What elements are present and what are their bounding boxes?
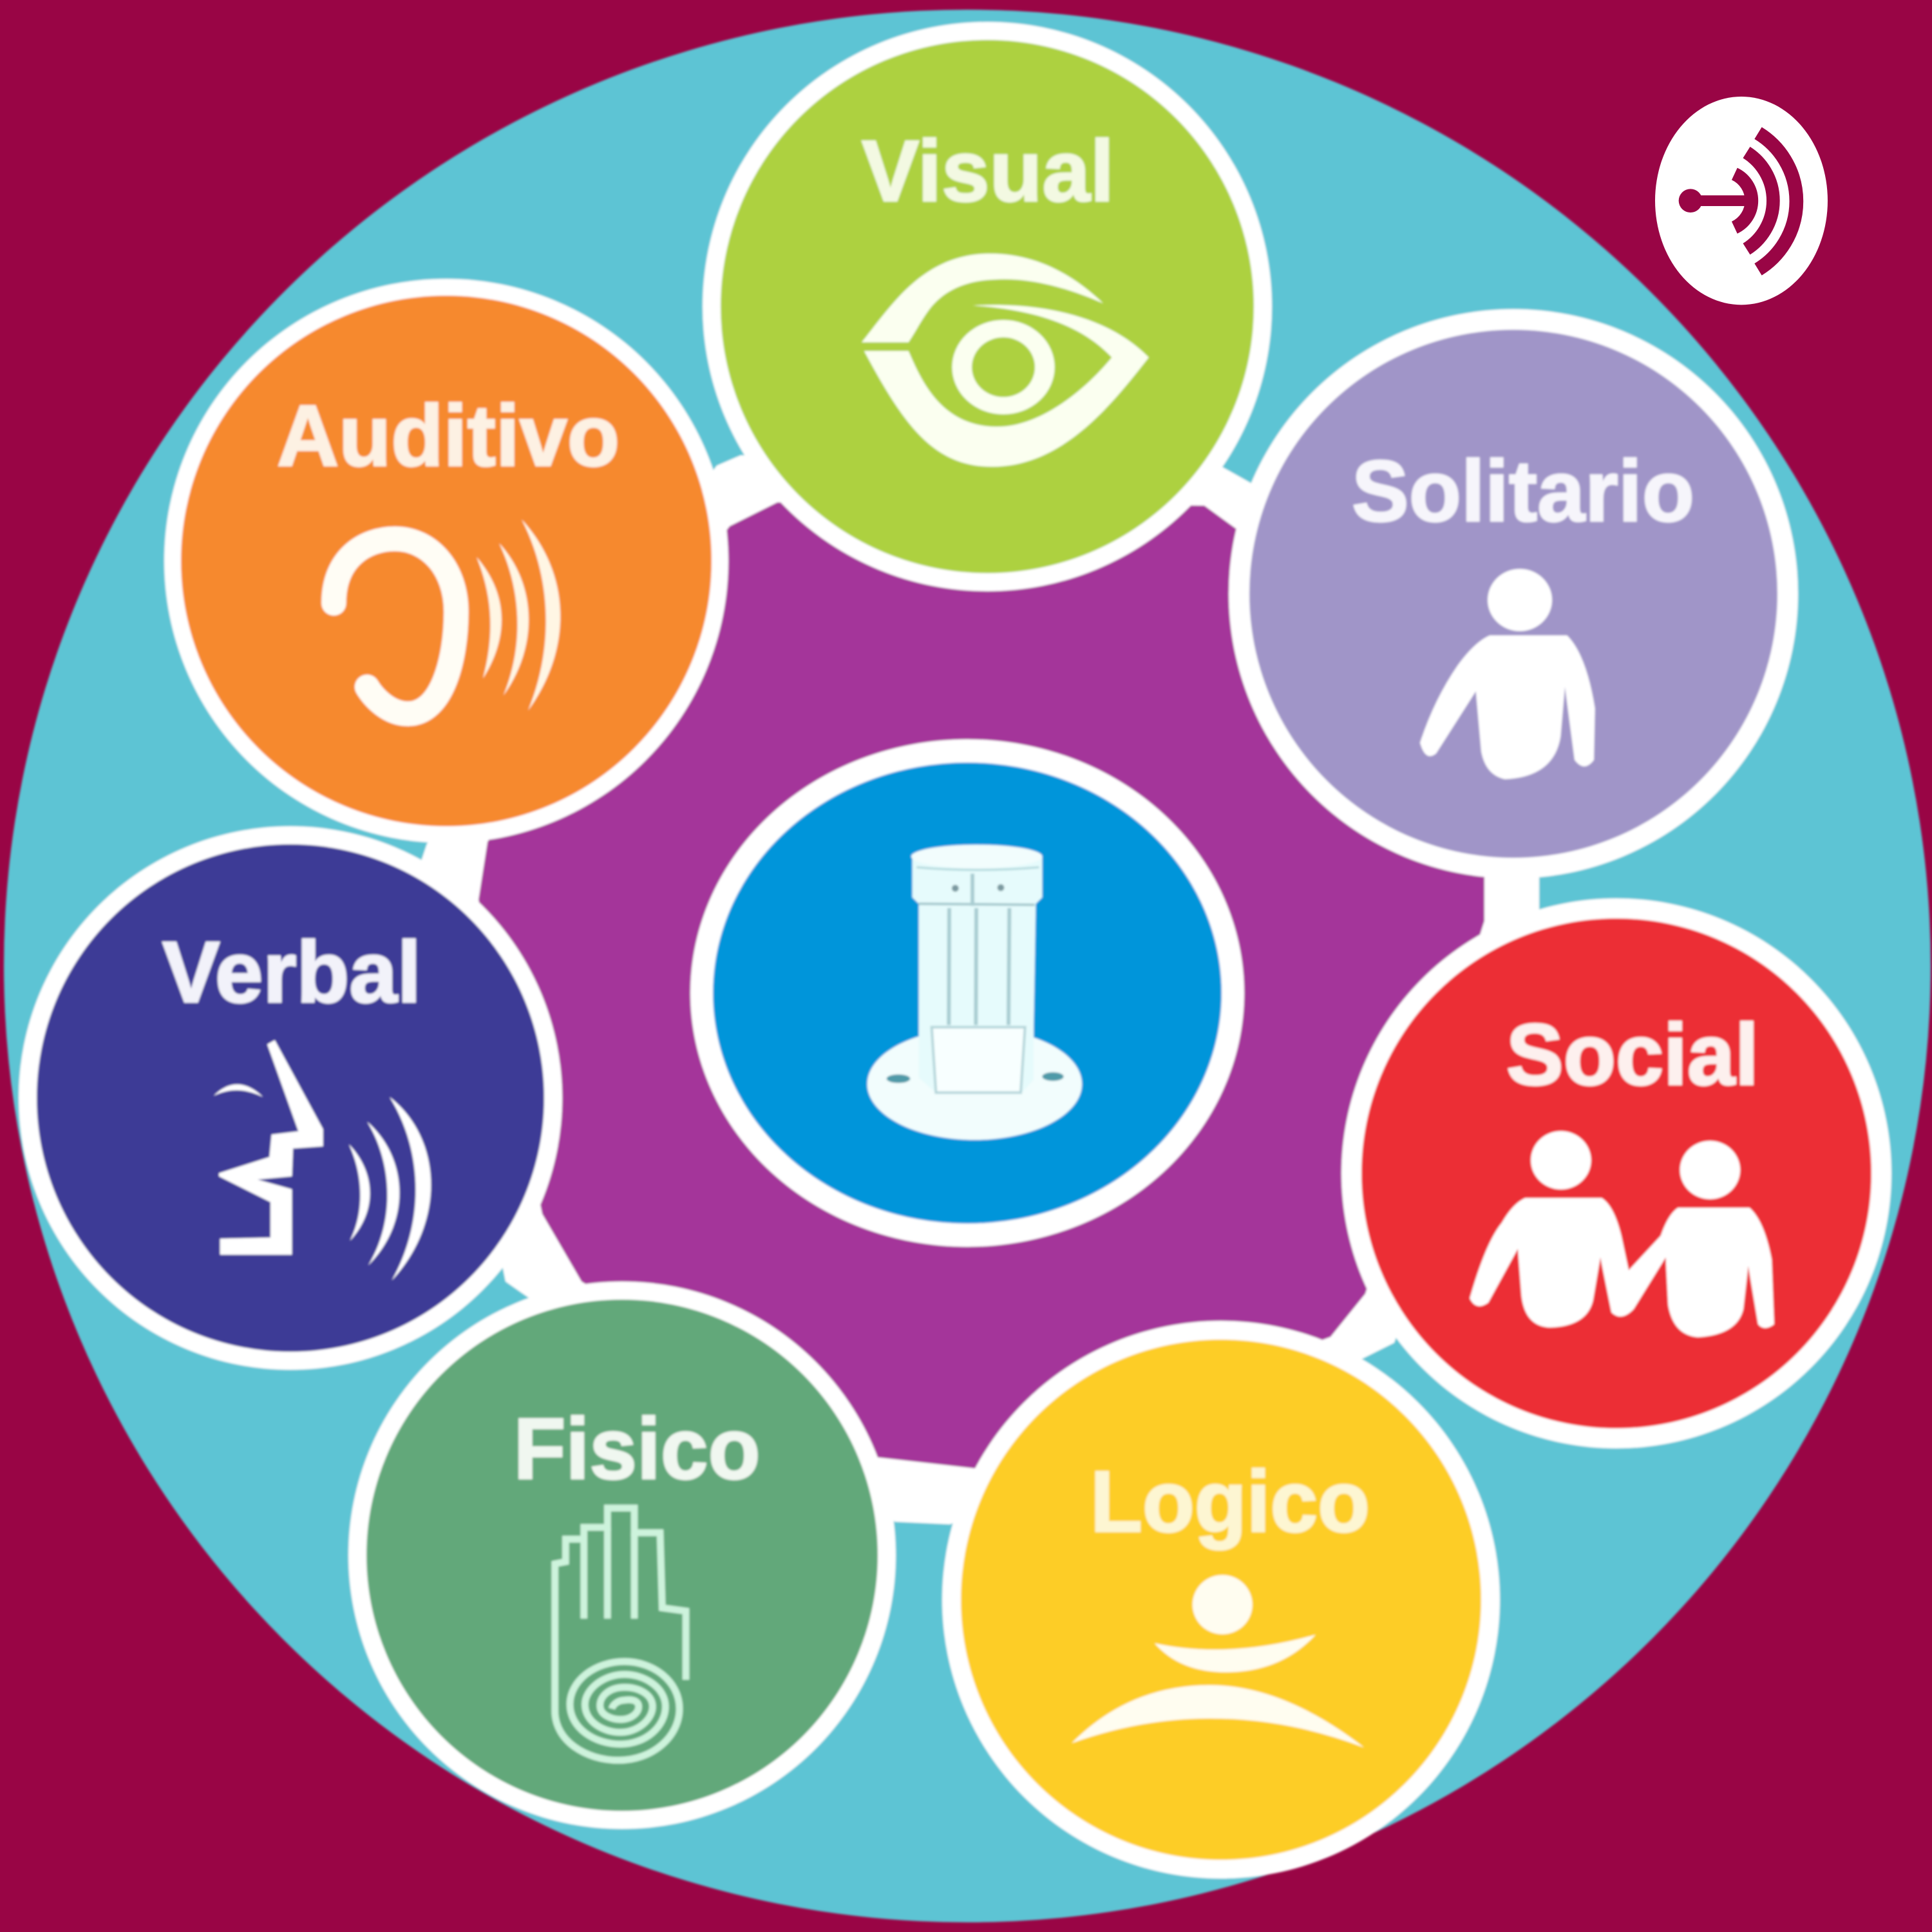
panel: Social — [1341, 898, 1891, 1448]
Visual green disc — [721, 40, 1254, 573]
panel: Auditivo — [164, 279, 728, 843]
icon: hand with spiral — [555, 1508, 686, 1760]
heading: Social: Social — [1506, 1006, 1759, 1103]
heading: Verbal: Verbal — [162, 923, 421, 1021]
Fisico green disc — [366, 1300, 878, 1811]
Auditivo orange disc — [181, 296, 712, 826]
icon: two people holding hands — [1470, 1131, 1774, 1337]
panel: Visual — [703, 22, 1272, 591]
icon: ear with sound waves — [334, 520, 560, 714]
icon: podcast logo badge — [1655, 97, 1828, 305]
heading: Fisico: Fisico — [514, 1400, 760, 1497]
Solitario lilac disc — [1249, 330, 1777, 858]
icon: column on round base — [867, 845, 1082, 1140]
icon: figure with arcs — [1072, 1575, 1364, 1747]
icon: speaking face — [214, 1040, 431, 1280]
panel: centre — [690, 739, 1244, 1247]
Social red disc — [1361, 918, 1871, 1428]
heading: Solitario: Solitario — [1352, 442, 1694, 540]
central purple heptagon — [478, 502, 1484, 1468]
icon: eye — [862, 254, 1149, 467]
white connector frame — [421, 455, 1539, 1524]
panel: Logico — [942, 1321, 1500, 1879]
heading: Visual: Visual — [862, 122, 1114, 220]
centre blue disc — [713, 762, 1222, 1224]
panel: Solitario — [1229, 309, 1798, 878]
panel: Verbal — [19, 826, 562, 1370]
Verbal indigo disc — [37, 844, 544, 1352]
panel: Fisico — [348, 1282, 896, 1829]
icon: single person — [1420, 569, 1595, 779]
heading: Auditivo: Auditivo — [277, 387, 620, 484]
heading: Logico: Logico — [1090, 1453, 1370, 1550]
Logico yellow disc — [961, 1340, 1481, 1860]
